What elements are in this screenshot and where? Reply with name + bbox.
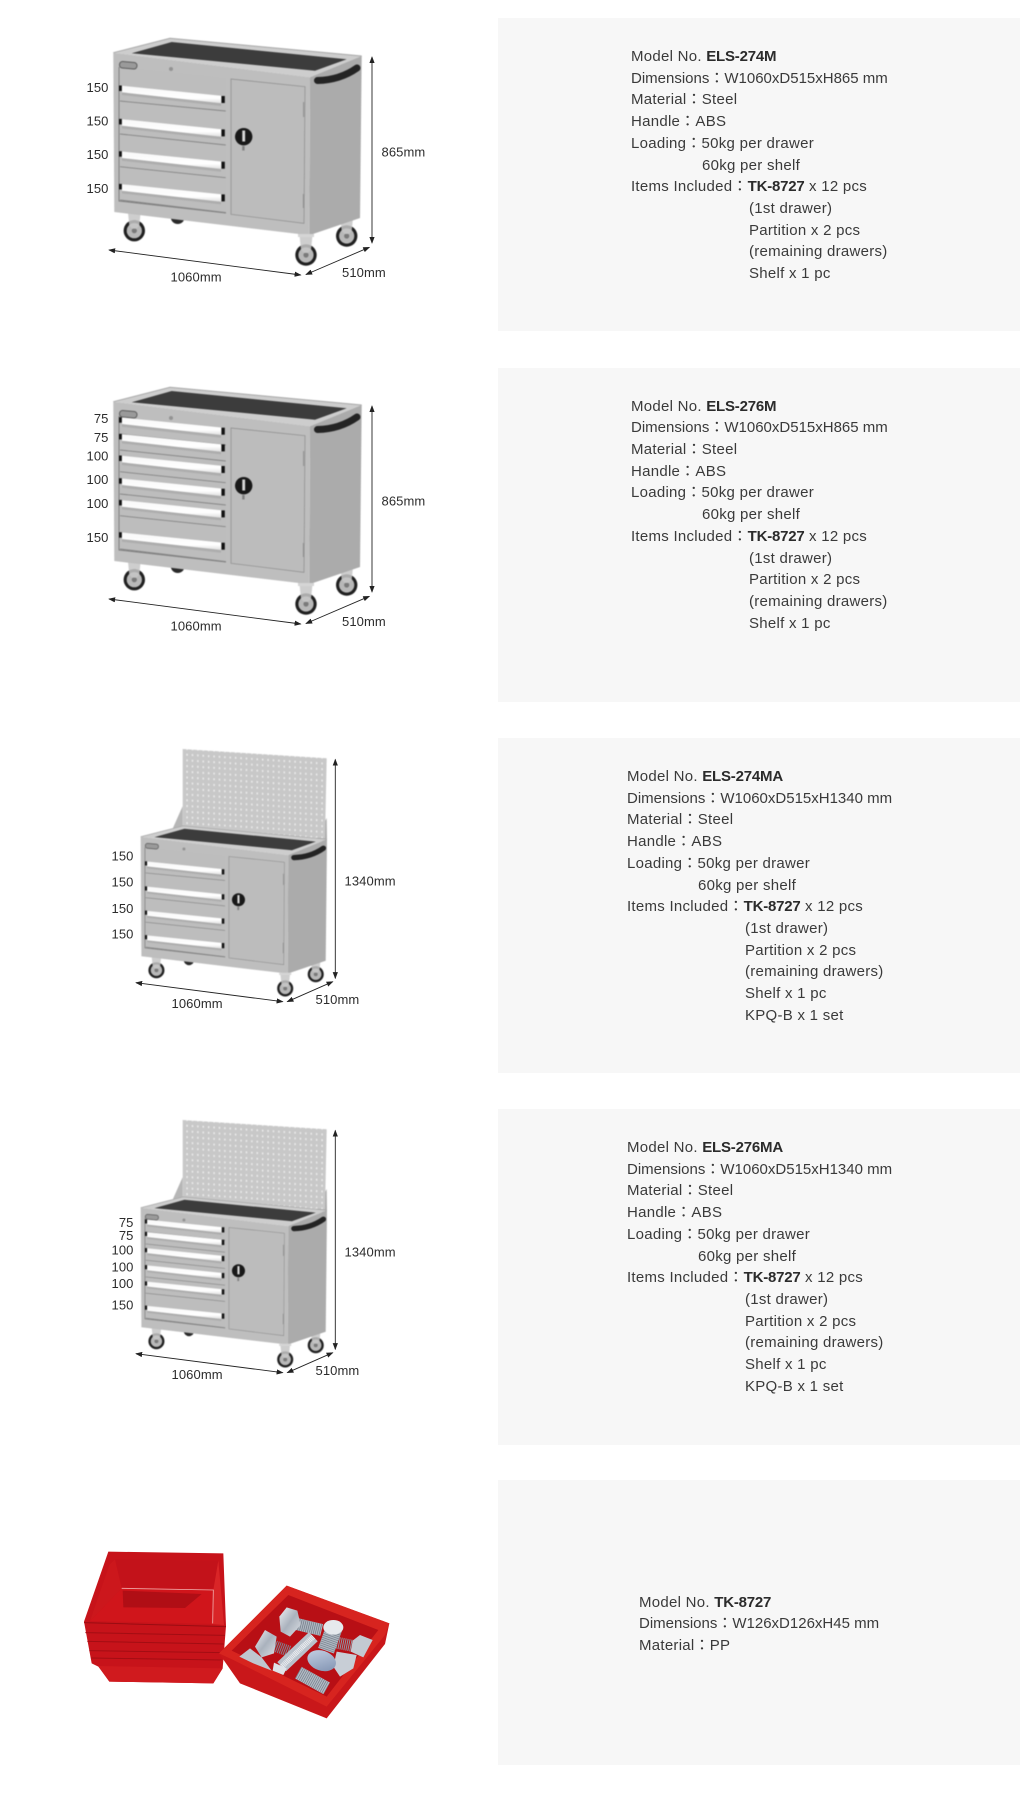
text block: ELS-276MA specs: Items Included：TK-8727 x 12 pcs (627, 1269, 863, 1286)
dimension labels: 100 (112, 1243, 134, 1258)
arrow: height (334, 760, 336, 978)
text block: ELS-276M specs: Loading：50kg per drawer (631, 484, 814, 501)
illustration: four-drawer cabinet (113, 38, 362, 266)
text block: ELS-276M specs: Partition x 2 pcs (749, 571, 860, 588)
arrow: width (109, 599, 301, 624)
stacked red trays (84, 1552, 226, 1683)
text block: ELS-274M specs: Handle：ABS (631, 113, 726, 130)
dimension labels: 100 (86, 448, 108, 463)
dimension labels: 75 (94, 430, 108, 445)
text block: ELS-274M specs: Material：Steel (631, 91, 737, 108)
dimension labels: 865mm (382, 144, 425, 159)
dimension labels: 150 (112, 1298, 134, 1313)
arrow: depth (287, 1353, 333, 1373)
text block: ELS-276MA specs: Handle：ABS (627, 1204, 722, 1221)
text block: ELS-276M specs (631, 398, 888, 632)
panel: ELS-274MA specifications (498, 738, 1020, 1073)
arrow: width (109, 250, 301, 275)
dimension labels: 75 (119, 1215, 134, 1230)
dimension labels: 100 (112, 1259, 134, 1274)
text block: ELS-276MA specs (627, 1139, 892, 1395)
text block: TK-8727 specs (639, 1594, 879, 1654)
text block: ELS-274M specs: Partition x 2 pcs (749, 222, 860, 239)
bolts (239, 1607, 373, 1688)
text block: ELS-276MA specs: (1st drawer) (745, 1291, 828, 1308)
text block: ELS-274MA specs: (1st drawer) (745, 920, 828, 937)
text block: ELS-276M specs: Model No. ELS-276M (631, 398, 776, 415)
dimension labels: 150 (86, 80, 108, 95)
illustration: six-drawer cabinet with pegboard (141, 1120, 327, 1367)
text block: ELS-276MA specs: Shelf x 1 pc (745, 1356, 827, 1373)
dimension labels: 150 (86, 530, 108, 545)
text block: ELS-276MA specs: 60kg per shelf (698, 1248, 796, 1265)
text block: ELS-274M specs: 60kg per shelf (702, 157, 800, 174)
arrow: depth (306, 247, 369, 274)
text block: ELS-276MA specs: Partition x 2 pcs (745, 1313, 856, 1330)
text block: ELS-276MA specs: KPQ-B x 1 set (745, 1378, 844, 1395)
text block: ELS-276M specs: (remaining drawers) (749, 593, 888, 610)
dimension labels: 1060mm (170, 619, 222, 634)
dimension labels: 1060mm (170, 270, 222, 285)
text block: ELS-274MA specs: Partition x 2 pcs (745, 942, 856, 959)
text block: ELS-274M specs: (1st drawer) (749, 200, 832, 217)
text block: ELS-276M specs: Handle：ABS (631, 463, 726, 480)
text block: ELS-274MA specs: (remaining drawers) (745, 963, 884, 980)
arrow: depth (306, 596, 369, 624)
text block: ELS-276M specs: Dimensions：W1060xD515xH865 mm (631, 419, 888, 436)
dimension labels: 1060mm (172, 996, 223, 1011)
arrow: depth (287, 982, 333, 1002)
dimension labels: 1340mm (344, 1244, 396, 1259)
dimension labels (86, 411, 425, 634)
dimension labels: 100 (112, 1276, 134, 1291)
arrow: height (371, 57, 373, 243)
panel: TK-8727 specifications (498, 1480, 1020, 1765)
dimension labels: 150 (86, 147, 108, 162)
text block: ELS-274M specs: Dimensions：W1060xD515xH865 mm (631, 70, 888, 87)
text block: ELS-276MA specs: Dimensions：W1060xD515xH1340 mm (627, 1161, 892, 1178)
dimension labels: 510mm (316, 992, 359, 1007)
text block: TK-8727 specs: Model No. TK-8727 (639, 1594, 771, 1610)
dimension labels: 510mm (342, 614, 386, 629)
text block: TK-8727 specs: Material：PP (639, 1637, 730, 1654)
single tray with bolts (219, 1586, 389, 1718)
arrow: height (334, 1130, 336, 1349)
dimension labels: 100 (86, 472, 108, 487)
illustration: four-drawer cabinet with pegboard (141, 749, 327, 996)
panel: ELS-276M specifications (498, 368, 1020, 702)
illustration: six-drawer cabinet (113, 387, 362, 615)
dimension labels (112, 849, 396, 1011)
text block: ELS-274M specs: Loading：50kg per drawer (631, 135, 814, 152)
dimension labels: 1060mm (172, 1367, 223, 1382)
text block: ELS-274MA specs: Model No. ELS-274MA (627, 768, 783, 785)
text block: ELS-276MA specs: Loading：50kg per drawer (627, 1226, 810, 1243)
text block: ELS-276MA specs: (remaining drawers) (745, 1334, 884, 1351)
cabinet: ELS-274M with dimensions (86, 38, 425, 285)
text block: ELS-276M specs: Material：Steel (631, 441, 737, 458)
text block: ELS-276M specs: (1st drawer) (749, 550, 832, 567)
text block: ELS-274MA specs: 60kg per shelf (698, 877, 796, 894)
dimension labels: 150 (112, 927, 134, 942)
text block: ELS-274M specs: Items Included：TK-8727 x 12 pcs (631, 178, 867, 195)
dimension labels (112, 1215, 396, 1382)
photo illustration: red TK-8727 trays with bolts (84, 1552, 389, 1718)
dimension labels: 510mm (342, 265, 386, 280)
dimension labels: 150 (86, 114, 108, 129)
dimension labels: 510mm (316, 1363, 359, 1378)
arrow: height (371, 406, 373, 592)
dimension labels: 1340mm (344, 873, 396, 888)
arrow: width (136, 983, 283, 1002)
text block: ELS-274MA specs: Material：Steel (627, 811, 733, 828)
dimension labels: 75 (119, 1228, 134, 1243)
dimension labels: 150 (86, 181, 108, 196)
dimension labels: 75 (94, 411, 108, 426)
text block: ELS-276MA specs: Model No. ELS-276MA (627, 1139, 783, 1156)
text block: ELS-274MA specs: Loading：50kg per drawer (627, 855, 810, 872)
cabinet: ELS-276MA with dimensions (112, 1120, 396, 1382)
text block: ELS-274M specs: Model No. ELS-274M (631, 48, 776, 65)
cabinet: ELS-276M with dimensions (86, 387, 425, 634)
text block: TK-8727 specs: Dimensions：W126xD126xH45 mm (639, 1615, 879, 1632)
text block: ELS-274MA specs: Shelf x 1 pc (745, 985, 827, 1002)
text block: ELS-274MA specs: Handle：ABS (627, 833, 722, 850)
dimension labels: 150 (112, 849, 134, 864)
dimension labels (86, 80, 425, 285)
text block: ELS-274MA specs: Items Included：TK-8727 x 12 pcs (627, 898, 863, 915)
text block: ELS-274MA specs (627, 768, 892, 1024)
dimension labels: 150 (112, 875, 134, 890)
dimension labels: 865mm (382, 493, 425, 508)
cabinet: ELS-274MA with dimensions (112, 749, 396, 1011)
text block: ELS-274M specs: Shelf x 1 pc (749, 265, 831, 282)
text block: ELS-274MA specs: Dimensions：W1060xD515xH1340 mm (627, 790, 892, 807)
text block: ELS-274MA specs: KPQ-B x 1 set (745, 1007, 844, 1024)
text block: ELS-276M specs: 60kg per shelf (702, 506, 800, 523)
text block: ELS-274M specs: (remaining drawers) (749, 243, 888, 260)
panel: ELS-276MA specifications (498, 1109, 1020, 1445)
text block: ELS-274M specs (631, 48, 888, 282)
text block: ELS-276M specs: Items Included：TK-8727 x 12 pcs (631, 528, 867, 545)
text block: ELS-276MA specs: Material：Steel (627, 1182, 733, 1199)
dimension labels: 100 (86, 496, 108, 511)
arrow: width (136, 1354, 283, 1373)
text block: ELS-276M specs: Shelf x 1 pc (749, 615, 831, 632)
dimension labels: 150 (112, 901, 134, 916)
panel: ELS-274M specifications (498, 18, 1020, 331)
